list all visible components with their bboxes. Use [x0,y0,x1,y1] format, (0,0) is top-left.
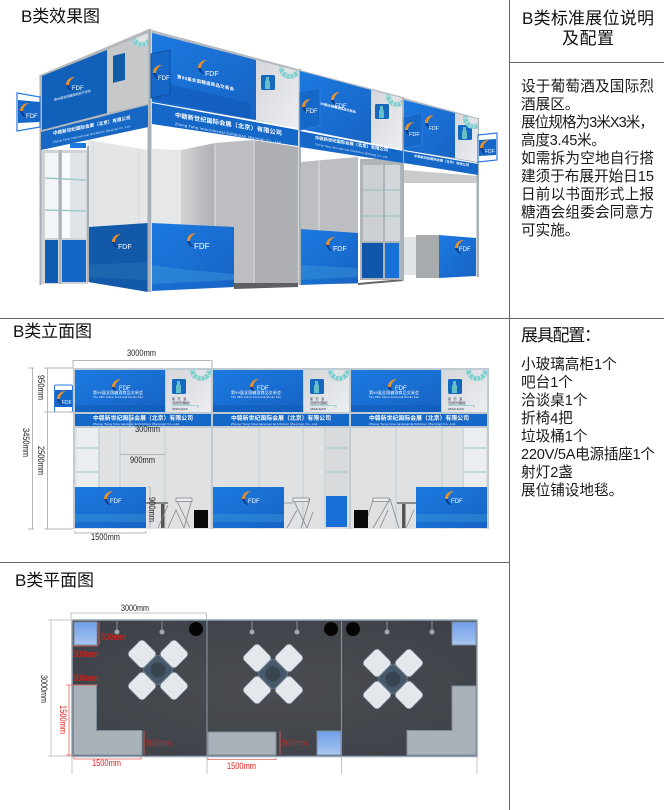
elevation counters: FDF [248,499,260,505]
plan booth 1 furniture [74,621,203,755]
elevation header: booth 3: WINE & LIQUOR [448,407,464,411]
heading: right description: B类标准展位说明 [522,9,654,28]
text block: equipment list [521,356,655,499]
text block: description: 日前以书面形式上报 [521,186,654,203]
text block: equipment list: 小玻璃高柜1个 [521,356,617,373]
elevation flag: FDF [62,400,72,406]
floor plan drawing [38,603,477,774]
elevation header: booth 3: FDF [395,386,407,392]
right fascia: booth 2: 第99届全国糖酒商品交易会 [318,100,357,114]
plan dimensions [38,603,477,774]
heading: elevation: B类立面图 [13,322,92,341]
elevation dimensions: 3000mm [127,348,156,359]
left fascia: FDF [72,86,84,92]
right display cabinet [360,159,402,280]
text block: description: 设于葡萄酒及国际烈 [521,78,654,95]
counters: FDF [459,247,471,253]
plan dimensions: 1500mm [92,758,121,769]
elevation header: booth 2: 葡萄酒 [310,396,324,401]
text block: equipment list: 垃圾桶1个 [521,428,588,445]
plan dimensions: 500mm [73,649,98,660]
frame posts [40,29,479,292]
right fascia: booth 1: 中赣新世纪国际会展（北京）有限公司 [175,111,282,137]
text block: description: 展位规格为3米X3米， [521,114,654,131]
left fascia: 第99届全国糖酒商品交易会 [54,88,92,102]
plan floor [72,620,477,756]
text block: description: 高度3.45米。 [521,132,606,149]
elevation dimensions: 1500mm [91,532,120,543]
elevation header: booth 3: 及国际烈酒展区 [448,400,466,405]
text block: description: 如需拆为空地自行搭 [521,150,654,167]
elevation header: booth 3: Zhong Tang International Exhibition (Beijing) Co.,Ltd. [369,422,456,426]
right fascia: booth 2: FDF [335,104,347,110]
elevation walls [75,428,487,529]
text block: equipment list: 展位铺设地毯。 [521,482,623,499]
text block: description: 建须于布展开始日15 [521,168,654,185]
elevation counters: FDF [110,499,122,505]
text block: description: 糖酒会组委会同意方 [521,203,654,221]
right fascia: booth 2: 中赣新世纪国际会展（北京）有限公司 [315,134,388,153]
right fascia: booth 1: FDF [205,71,219,78]
elevation header: booth 2: 中赣新世纪国际会展（北京）有限公司 [231,414,331,422]
elevation header: booth 3: 第99届全国糖酒商品交易会 [369,389,419,395]
elevation header: booth 2: The 99th China Food and Drinks Fair [231,395,281,399]
counters: FDF [333,246,347,253]
text block: equipment list: 吧台1个 [521,374,573,391]
elevation header: booth 3: 葡萄酒 [448,396,462,401]
side flags: FDF [409,132,420,138]
side flags [17,50,497,162]
side flags: FDF [306,109,318,115]
elevation header: booth 2 [213,370,349,426]
text block: description [521,78,654,239]
elevation cabinets [77,428,486,528]
elevation header: booth 2: WINE & LIQUOR [310,407,326,411]
plan dimensions: 3000mm [38,675,49,703]
left fascia: Zhong Tang International Exhibition (Beijing) Co.,Ltd. [53,124,131,144]
elevation flag [54,385,72,412]
side flags: FDF [158,76,170,82]
elevation header: booth 3: The 99th China Food and Drinks Fair [369,395,419,399]
right fascia: booth 2: Zhong Tang International Exhibition (Beijing) Co.,Ltd. [315,142,388,159]
heading: 3D view: B类效果图 [21,7,100,26]
heading: right description [522,9,654,48]
right fascia: booth 1: 第99届全国糖酒商品交易会 [177,73,235,93]
elevation dimensions: 300mm [135,424,160,435]
left fascia: 中赣新世纪国际会展（北京）有限公司 [53,114,131,137]
back walls [88,140,478,289]
elevation dimensions: 950mm [35,375,46,400]
elevation dimensions: 2500mm [35,446,46,475]
elevation header: booth 2: Zhong Tang International Exhibition (Beijing) Co.,Ltd. [231,422,318,426]
right fascia: booth 3: FDF [429,126,439,132]
heading: right equipment: 展具配置： [521,326,601,345]
right fascia: booth 3 [404,98,485,175]
elevation header: booth 3: 中赣新世纪国际会展（北京）有限公司 [369,414,469,422]
elevation counters [75,487,487,528]
side flags: FDF [26,114,38,120]
plan dimensions: 500mm [101,632,126,643]
elevation header: booth 1: The 99th China Food and Drinks Fair [93,395,143,399]
render: 3D booth view [17,25,497,292]
elevation furniture [146,498,416,528]
text block: equipment list: 射灯2盏 [521,464,573,481]
counters: FDF [118,244,132,251]
elevation header: booth 1 [75,370,211,426]
text block: description: 酒展区。 [521,96,579,113]
right fascia: booth 2 [300,70,408,163]
plan booth 2 furniture [208,621,341,755]
plan dimensions: 3000mm [121,603,149,614]
counters: FDF [194,242,210,251]
right fascia: booth 1 [152,30,301,146]
text block: equipment list: 220V/5A电源插座1个 [521,446,655,463]
elevation header: booth 1: Zhong Tang International Exhibition (Beijing) Co.,Ltd. [93,422,180,426]
elevation dimensions: 900mm [130,455,155,466]
plan dimensions: 500mm [282,738,307,749]
right fascia: booth 3: 中赣新世纪国际会展（北京）有限公司 [414,153,469,167]
plan dimensions: 500mm [73,673,98,684]
elevation header: booth 1: 及国际烈酒展区 [172,400,190,405]
elevation counters: FDF [451,499,463,505]
elevation header: booth 2: 第99届全国糖酒商品交易会 [231,389,281,395]
left fascia [40,25,153,150]
plan dimensions: 1500mm [227,761,256,772]
elevation header: booth 2: 及国际烈酒展区 [310,400,328,405]
elevation dimensions: 3450mm [20,428,31,457]
elevation header: booth 1: WINE & LIQUOR [172,407,188,411]
plan booth 3 furniture [346,621,476,755]
counters [88,223,476,292]
plan dimensions: 500mm [146,738,171,749]
plan dimensions: 1500mm [57,705,68,734]
right fascia: booth 1: Zhong Tang International Exhibition (Beijing) Co.,Ltd. [175,122,282,145]
elevation header: booth 1: 中赣新世纪国际会展（北京）有限公司 [93,414,193,422]
side flags: FDF [485,149,495,155]
elevation header: booth 2: FDF [257,386,269,392]
elevation drawing [20,348,489,543]
text block: equipment list: 洽谈桌1个 [521,392,588,409]
elevation dimensions: 900mm [146,497,157,522]
elevation header: booth 3 [351,370,487,426]
elevation backdrop [73,368,489,529]
left display cabinet [40,143,88,284]
elevation dimensions [20,348,212,543]
text block: description: 可实施。 [521,222,579,239]
heading: plan: B类平面图 [15,571,94,590]
elevation header: booth 1: 葡萄酒 [172,396,186,401]
heading: right description: 及配置 [562,29,614,48]
elevation header: booth 1: FDF [119,386,131,392]
text block: equipment list: 折椅4把 [521,410,573,427]
elevation header: booth 1: 第99届全国糖酒商品交易会 [93,389,143,395]
